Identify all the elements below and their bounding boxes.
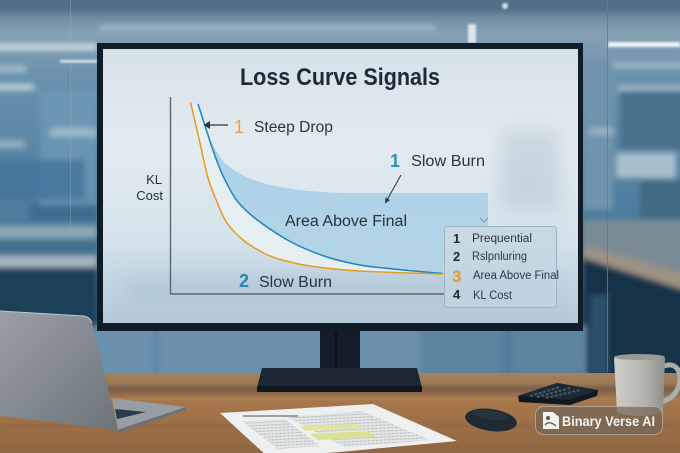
window strip below monitor <box>92 325 587 379</box>
callout: steep drop: Steep Drop <box>254 119 333 136</box>
desk <box>0 373 680 453</box>
legend panel: 3 <box>452 267 461 286</box>
monitor frame <box>97 43 583 331</box>
y axis label: Cost <box>136 188 163 203</box>
y axis label: KL <box>146 172 162 187</box>
legend panel: Prequential <box>472 233 532 245</box>
icon: binary verse logo <box>543 412 559 429</box>
band between curves <box>190 102 443 274</box>
label: area above final: Area Above Final <box>285 213 407 230</box>
y axis <box>170 97 445 294</box>
watermark badge <box>536 406 662 434</box>
coffee mug <box>614 354 680 416</box>
callout: slow burn bottom: 2 <box>239 271 249 291</box>
legend panel: Area Above Final <box>473 270 559 282</box>
laptop <box>0 311 186 433</box>
title: Loss Curve Signals <box>240 64 440 91</box>
legend panel <box>444 226 559 308</box>
callout: slow burn bottom <box>239 271 332 291</box>
blue curve: slow burn <box>198 104 443 274</box>
calculator <box>518 383 598 405</box>
panel: screen haze <box>125 130 560 305</box>
callout: slow burn top: Slow Burn <box>411 153 485 170</box>
small chevron <box>480 218 488 222</box>
computer mouse <box>464 405 518 435</box>
callout: slow burn top <box>385 151 485 204</box>
legend panel: KL Cost <box>473 290 513 302</box>
legend panel: 4 <box>453 287 461 302</box>
y axis label <box>136 172 163 203</box>
monitor stand <box>257 331 422 392</box>
legend panel: Rslpnluring <box>472 251 527 263</box>
orange curve: steep drop <box>190 102 443 274</box>
callout: slow burn top: 1 <box>390 151 400 171</box>
area above final <box>198 104 488 274</box>
paper document <box>220 404 457 453</box>
callout: slow burn bottom: Slow Burn <box>259 274 332 291</box>
legend panel: 2 <box>453 249 460 264</box>
legend panel: 1 <box>453 231 460 246</box>
chart: loss curves <box>170 97 488 294</box>
callout: steep drop <box>204 117 333 137</box>
callout: steep drop: 1 <box>234 117 244 137</box>
watermark badge: Binary Verse AI <box>562 413 655 429</box>
